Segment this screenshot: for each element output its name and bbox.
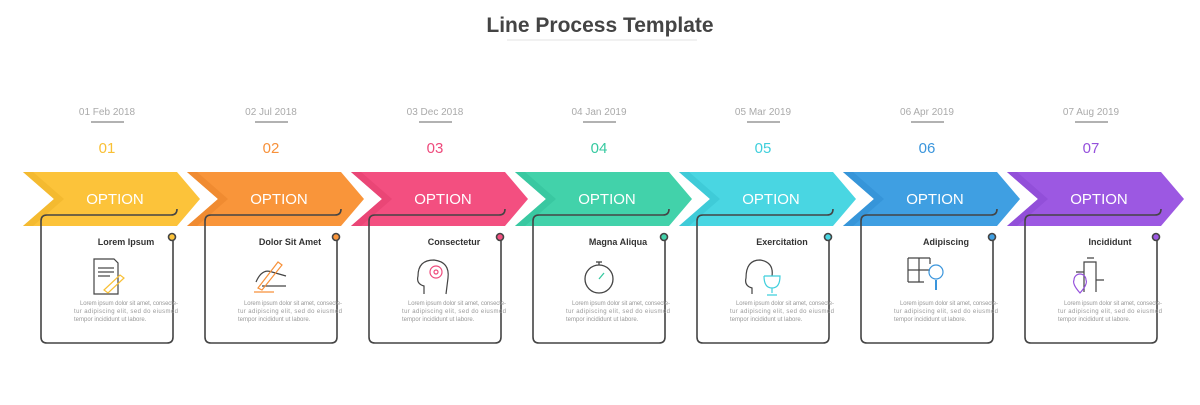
- text 2: tur adipiscing elit, sed do eiusmod: [238, 309, 342, 315]
- arrow 3: OPTION: [414, 191, 472, 208]
- text 4: tempor incididunt ut labore.: [566, 317, 639, 323]
- date 2: 02 Jul 2018: [245, 107, 297, 118]
- text 6: tur adipiscing elit, sed do eiusmod: [894, 309, 998, 315]
- heading 2: Dolor Sit Amet: [259, 237, 321, 247]
- box 3: [369, 209, 505, 343]
- date 3: 03 Dec 2018: [407, 107, 464, 118]
- step 5: [679, 107, 856, 343]
- box 5: [697, 209, 833, 343]
- heading 6: Adipiscing: [923, 237, 969, 247]
- icon 2: [254, 262, 286, 292]
- number 3: 03: [427, 140, 443, 157]
- arrow 6: OPTION: [906, 191, 964, 208]
- text 1: tur adipiscing elit, sed do eiusmod: [74, 309, 178, 315]
- step 7: [1007, 107, 1184, 343]
- text 1: tempor incididunt ut labore.: [74, 317, 147, 323]
- arrow 5: [679, 172, 856, 226]
- text 3: Lorem ipsum dolor sit amet, consecte-: [408, 301, 506, 307]
- text 2: tempor incididunt ut labore.: [238, 317, 311, 323]
- icon 4: [585, 262, 613, 293]
- arrow 7: [1007, 172, 1184, 226]
- arrow 6: [843, 172, 1020, 226]
- text 5: tur adipiscing elit, sed do eiusmod: [730, 309, 834, 315]
- box 6: [861, 209, 997, 343]
- icon 3: [418, 260, 448, 294]
- text 3: tempor incididunt ut labore.: [402, 317, 475, 323]
- date 5: 05 Mar 2019: [735, 107, 792, 118]
- heading 3: Consectetur: [428, 237, 481, 247]
- arrow 3: [351, 172, 528, 226]
- box 1: [41, 209, 177, 343]
- text 6: Lorem ipsum dolor sit amet, consecte-: [900, 301, 998, 307]
- arrow 2: [187, 172, 364, 226]
- heading 1: Lorem Ipsum: [98, 237, 154, 247]
- arrow 1: OPTION: [86, 191, 144, 208]
- arrow 4: [515, 172, 692, 226]
- number 2: 02: [263, 140, 279, 157]
- arrow 7: OPTION: [1070, 191, 1128, 208]
- icon 6: [908, 258, 943, 290]
- text 7: Lorem ipsum dolor sit amet, consecte-: [1064, 301, 1162, 307]
- icon 7: [1074, 258, 1104, 293]
- step 3: [351, 107, 528, 343]
- text 4: Lorem ipsum dolor sit amet, consecte-: [572, 301, 670, 307]
- text 1: Lorem ipsum dolor sit amet, consecte-: [80, 301, 178, 307]
- title: Line Process Template: [486, 14, 714, 37]
- icon 5: [746, 260, 780, 295]
- box 2: [205, 209, 341, 343]
- date 4: 04 Jan 2019: [571, 107, 627, 118]
- step 6: [843, 107, 1020, 343]
- number 5: 05: [755, 140, 771, 157]
- arrow 5: OPTION: [742, 191, 800, 208]
- text 7: tempor incididunt ut labore.: [1058, 317, 1131, 323]
- heading 4: Magna Aliqua: [589, 237, 648, 247]
- date 7: 07 Aug 2019: [1063, 107, 1120, 118]
- date 1: 01 Feb 2018: [79, 107, 136, 118]
- heading 5: Exercitation: [756, 237, 808, 247]
- arrow 4: OPTION: [578, 191, 636, 208]
- box 4: [533, 209, 669, 343]
- step 4: [515, 107, 692, 343]
- number 7: 07: [1083, 140, 1099, 157]
- step 1: [23, 107, 200, 343]
- text 6: tempor incididunt ut labore.: [894, 317, 967, 323]
- icon 1: [94, 259, 124, 294]
- number 1: 01: [99, 140, 115, 157]
- step 2: [187, 107, 364, 343]
- arrow 1: [23, 172, 200, 226]
- text 7: tur adipiscing elit, sed do eiusmod: [1058, 309, 1162, 315]
- number 6: 06: [919, 140, 935, 157]
- date 6: 06 Apr 2019: [900, 107, 954, 118]
- text 4: tur adipiscing elit, sed do eiusmod: [566, 309, 670, 315]
- text 5: tempor incididunt ut labore.: [730, 317, 803, 323]
- heading 7: Incididunt: [1088, 237, 1132, 247]
- arrow 2: OPTION: [250, 191, 308, 208]
- number 4: 04: [591, 140, 607, 157]
- text 2: Lorem ipsum dolor sit amet, consecte-: [244, 301, 342, 307]
- text 3: tur adipiscing elit, sed do eiusmod: [402, 309, 506, 315]
- text 5: Lorem ipsum dolor sit amet, consecte-: [736, 301, 834, 307]
- box 7: [1025, 209, 1161, 343]
